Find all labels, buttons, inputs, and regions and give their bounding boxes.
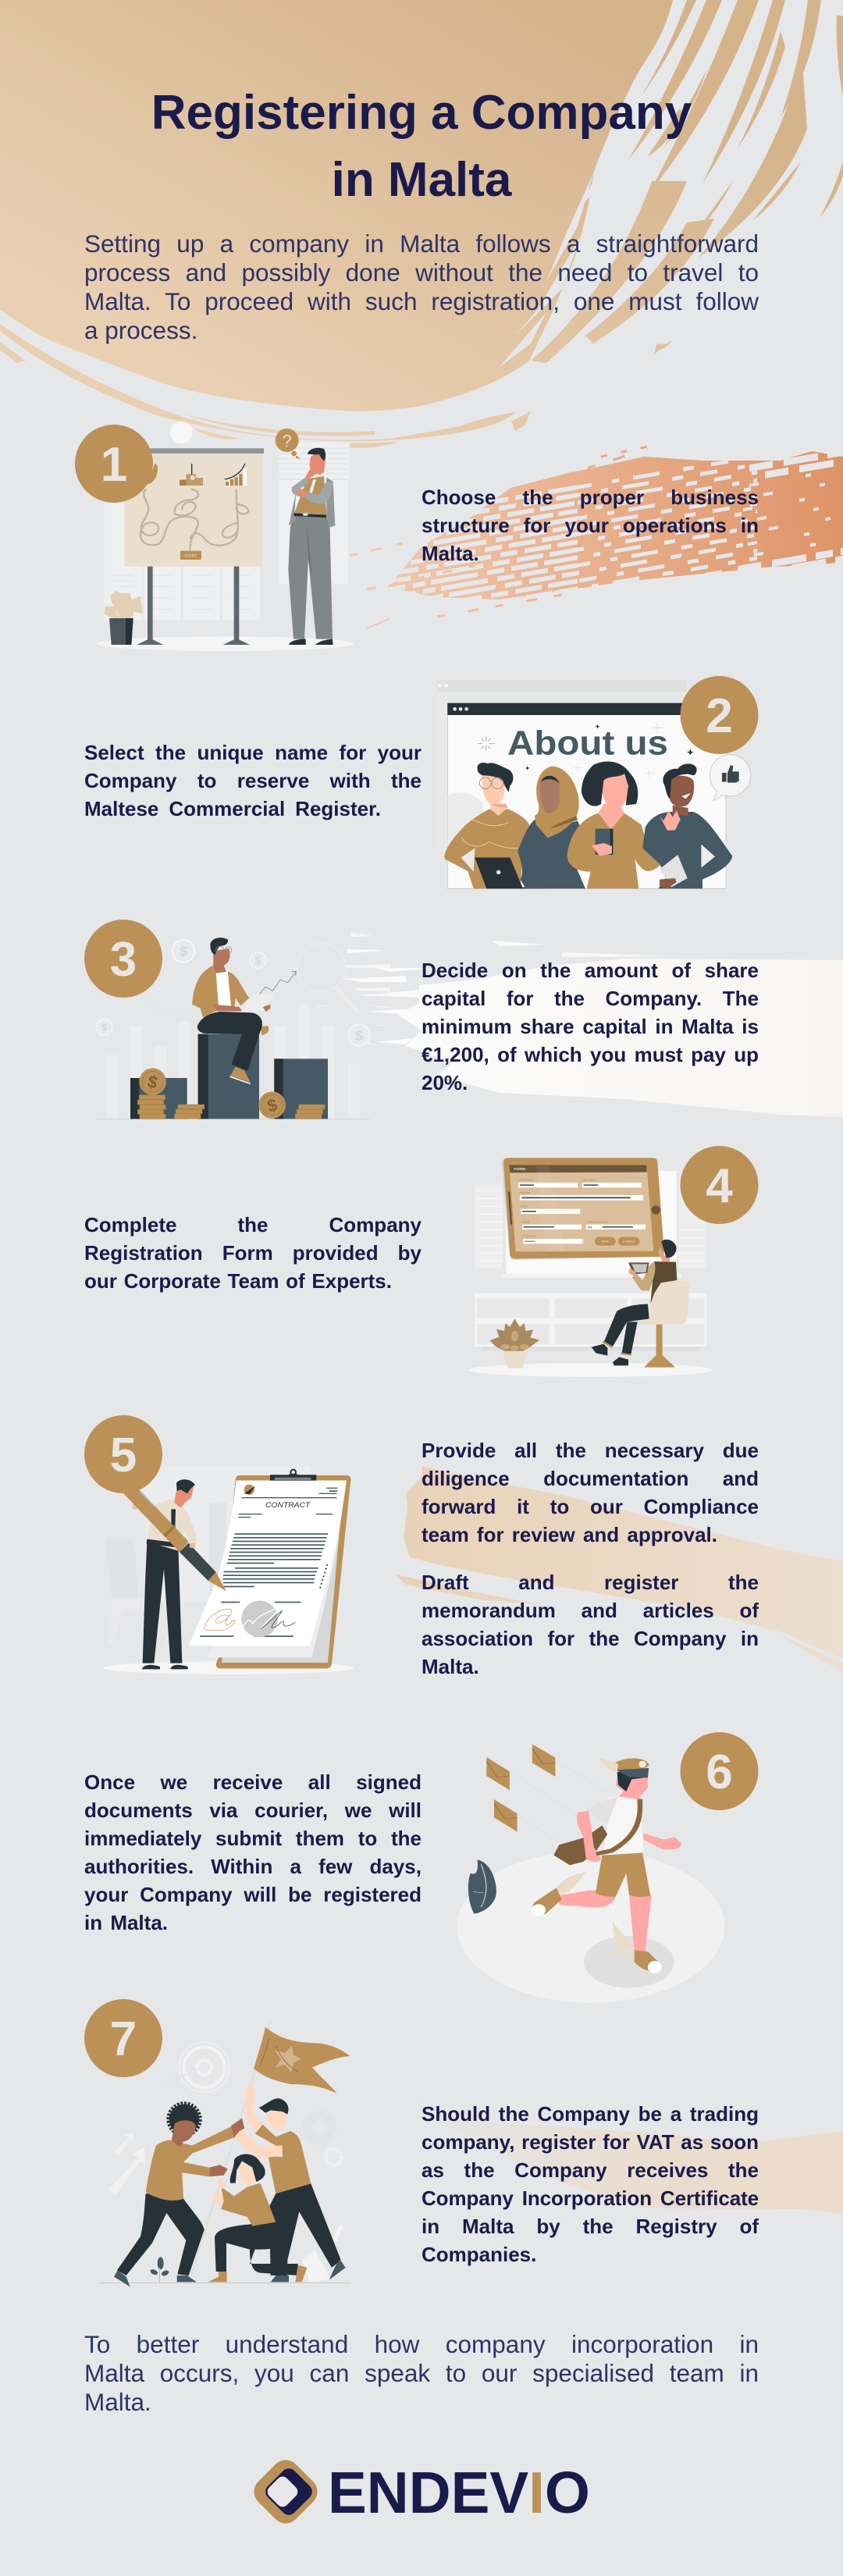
big tablet form: Contact Number [585, 1220, 609, 1224]
closing paragraph: To better understand how company incorporation in [84, 2330, 759, 2358]
step 1 text [422, 486, 759, 565]
person: man waving with tablet [642, 763, 732, 888]
heading: About us [507, 724, 668, 763]
step 5 text: Provide all the necessary due [422, 1439, 759, 1462]
giant pen [123, 1489, 226, 1591]
background circles [457, 1851, 724, 2003]
flying envelopes [486, 1744, 555, 1832]
person: right man holding flag [233, 2083, 346, 2282]
badge 6 [681, 1732, 759, 1810]
coin stacks [137, 1095, 325, 1119]
brush: step 1 orange [350, 441, 843, 656]
big tablet form: Last Name [582, 1177, 597, 1181]
big tablet form: Address [519, 1190, 531, 1194]
large coins: $ [145, 1071, 160, 1093]
background coins [96, 940, 370, 1046]
step 6 text: your Company will be registered [84, 1883, 422, 1906]
gears [303, 2112, 343, 2167]
start tag: START [184, 553, 197, 558]
rising graph line [260, 971, 296, 994]
big tablet form: Continue [623, 1240, 635, 1244]
big tablet form: State [521, 1204, 528, 1208]
step 6 text: immediately submit them to the [84, 1827, 422, 1850]
step 2 text [84, 741, 422, 820]
question bubble: ? [283, 431, 292, 450]
step 2 text: Select the unique name for your [84, 741, 422, 764]
step 1 text: structure for your operations in [422, 514, 759, 537]
question bubble [276, 429, 301, 459]
step 3 text: €1,200, of which you must pay up [422, 1043, 759, 1066]
step 7 text [422, 2102, 759, 2266]
thinking man [288, 448, 335, 645]
background bars [107, 1005, 360, 1119]
step 6 text [84, 1770, 422, 1934]
big tablet form: Password [523, 1233, 536, 1237]
illustration 7: team raising a flag [99, 2022, 350, 2286]
step 7 text: company, register for VAT as soon [422, 2130, 759, 2154]
illustration 1: man studying a path chart [96, 422, 354, 651]
clipboard and contract: CONTRACT [265, 1501, 311, 1509]
plant in pot [490, 1318, 539, 1368]
white brush flecks [318, 933, 390, 1046]
brush: step 3 white [347, 934, 843, 1117]
illustration 6: running courier [457, 1744, 724, 2003]
sparkles [478, 724, 663, 778]
step 6 text: in Malta. [84, 1911, 168, 1934]
step 5 second text: memorandum and articles of [422, 1599, 759, 1622]
title [151, 86, 692, 206]
step 2 text: Maltese Commercial Register. [84, 797, 381, 820]
logo: Endevio: ENDEVIO [328, 2460, 590, 2525]
big tablet form: ••••••• [525, 1240, 535, 1244]
step 7 text: Companies. [422, 2243, 536, 2266]
step 4 text: our Corporate Team of Experts. [84, 1269, 392, 1293]
person: woman with hijab [518, 767, 585, 888]
thumbs up bubble [710, 755, 751, 801]
step 5 second text: Draft and register the [422, 1571, 759, 1594]
step 1 text: Choose the proper business [422, 486, 759, 509]
step 5 text: team for review and approval. [422, 1523, 717, 1546]
plant leaf [468, 1859, 496, 1914]
badge 2 [681, 676, 759, 754]
office background [105, 1466, 311, 1645]
badge 1 [75, 425, 153, 503]
big tablet form: First Name [518, 1177, 534, 1181]
illustration 3: man on bar chart with coins [96, 933, 390, 1119]
intro paragraph: Setting up a company in Malta follows a straightforward [84, 229, 759, 258]
ground plants and line [99, 2222, 350, 2283]
step 7 text: Should the Company be a trading [422, 2102, 759, 2126]
clipboard and contract [189, 1470, 350, 1668]
front browser window [447, 703, 726, 888]
title: Registering a Company [151, 86, 692, 139]
badge 4: 4 [706, 1159, 733, 1213]
step 7 text: Company Incorporation Certificate [422, 2186, 759, 2210]
step 5 text: forward it to our Compliance [422, 1495, 759, 1518]
brush: step 7 beige [403, 2097, 843, 2214]
closing paragraph [84, 2330, 759, 2416]
step 5 text: diligence documentation and [422, 1467, 759, 1490]
chair [627, 1281, 689, 1368]
step 4 text: Registration Form provided by [84, 1241, 422, 1265]
step 5 second text: Malta. [422, 1655, 479, 1678]
floor shadow [468, 1363, 713, 1377]
badge 7: 7 [110, 2012, 137, 2066]
illustration 2: about us team [437, 681, 751, 888]
background coins: $ [101, 1022, 108, 1034]
closing paragraph: Malta occurs, you can speak to our specialised team in [84, 2359, 759, 2387]
grey slits in the header brush [500, 80, 634, 367]
brush: step 5 beige [395, 1466, 843, 1672]
step 3 text: Decide on the amount of share [422, 959, 759, 982]
badge 1: 1 [101, 438, 127, 492]
step 6 text: documents via courier, we will [84, 1799, 422, 1822]
background arrows [108, 2133, 145, 2195]
step 6 text: authorities. Within a few days, [84, 1855, 422, 1878]
step 3 text: capital for the Company. The [422, 987, 759, 1010]
closing paragraph: Malta. [84, 2388, 151, 2416]
step 3 text: minimum share capital in Malta is [422, 1015, 759, 1038]
big tablet form: Email [521, 1220, 529, 1224]
badge 3: 3 [110, 933, 137, 987]
icons on the board [146, 463, 247, 486]
man holding the pen [133, 1479, 197, 1669]
courier [532, 1758, 681, 1973]
step 7 text: as the Company receives the [422, 2158, 759, 2182]
cabinet [475, 1293, 706, 1350]
step 1 text: Malta. [422, 542, 479, 565]
floor shadow [96, 636, 354, 651]
intro paragraph: Malta. To proceed with such registration, one must follow [84, 287, 759, 315]
magnifying glass [146, 943, 359, 1013]
winding paths [140, 489, 248, 550]
step 3 text: 20%. [422, 1071, 468, 1094]
dark bars [130, 1034, 328, 1119]
intro paragraph: process and possibly done without the need to travel to [84, 258, 759, 286]
illustration 4: filling in a registration form [468, 1158, 713, 1377]
window shutters [104, 443, 349, 621]
badge 5 [84, 1415, 162, 1493]
person: kneeling woman [208, 2154, 307, 2282]
flag pole and flag [191, 2022, 350, 2275]
large coins: $ [265, 1094, 279, 1116]
badge 7 [84, 1999, 162, 2077]
person: woman holding phone [567, 762, 675, 888]
step 5 text [422, 1439, 759, 1546]
step 2 text: Company to reserve with the [84, 769, 422, 792]
badge 3 [84, 920, 162, 998]
header brush stroke [0, 0, 843, 448]
background coins: $ [255, 955, 261, 966]
seated person with tablet [592, 1240, 677, 1365]
step 7 text: in Malta by the Registry of [422, 2215, 759, 2238]
seated man with tablet [192, 938, 275, 1084]
big tablet form: +31 [587, 1225, 593, 1229]
person: left man [114, 2105, 244, 2286]
badge 5: 5 [110, 1429, 137, 1482]
step 5 second text [422, 1571, 759, 1678]
step 3 text [422, 959, 759, 1094]
step 4 text: Complete the Company [84, 1213, 422, 1236]
potted plant [104, 591, 143, 645]
floor shadow [103, 1661, 354, 1674]
motion lines [510, 1759, 607, 1850]
target with arrow [164, 2042, 229, 2092]
intro paragraph: a process. [84, 316, 197, 344]
big tablet form [502, 1158, 664, 1260]
big tablet form: FORM [514, 1167, 525, 1172]
chart board [124, 454, 262, 567]
background coins: $ [355, 1027, 363, 1043]
back browser window [437, 681, 687, 692]
background coins: $ [180, 944, 187, 959]
start tag [180, 551, 201, 560]
person: man with glasses and laptop [444, 763, 545, 888]
badge 2: 2 [706, 689, 733, 743]
logo: Endevio [248, 2454, 590, 2529]
badge 6: 6 [706, 1745, 733, 1799]
back wall: screen and blinds [506, 1171, 677, 1274]
badge 4 [681, 1146, 759, 1224]
step 4 text [84, 1213, 422, 1293]
wall clock [170, 422, 193, 443]
large coins [139, 1068, 286, 1119]
intro paragraph [84, 229, 759, 344]
illustration 5: signing a contract with giant pen [103, 1466, 354, 1674]
step 6 text: Once we receive all signed [84, 1770, 422, 1794]
step 5 second text: association for the Company in [422, 1627, 759, 1650]
title: in Malta [332, 153, 511, 206]
big tablet form: Save [602, 1240, 610, 1244]
